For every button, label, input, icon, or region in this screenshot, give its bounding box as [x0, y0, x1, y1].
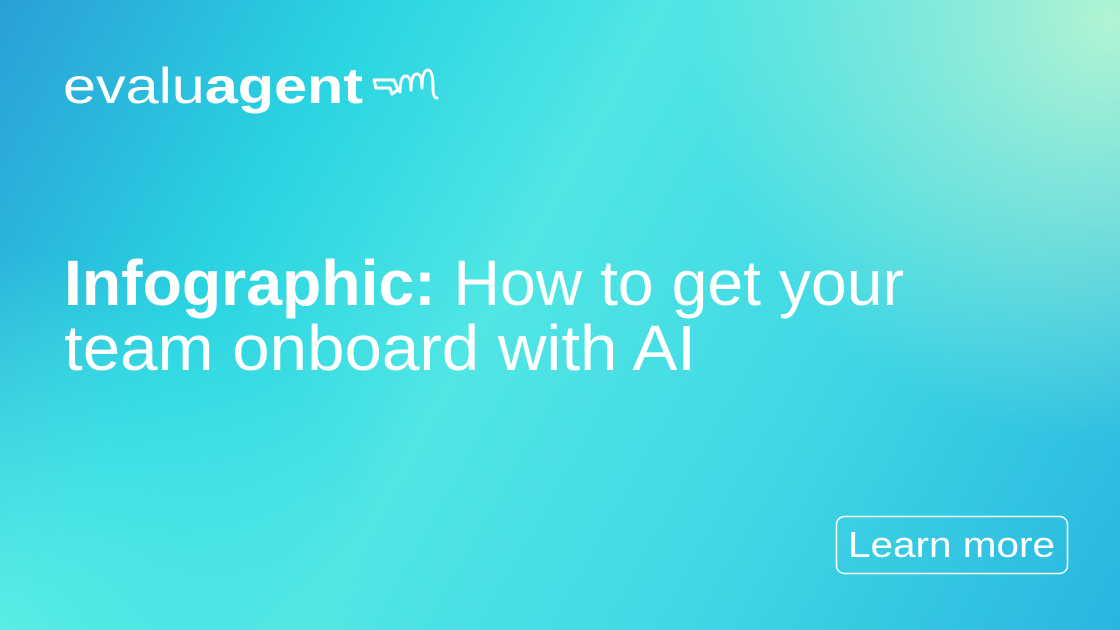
button: learn more: Learn more	[848, 524, 1055, 565]
logo: evalu agent	[63, 58, 363, 114]
button: learn more	[836, 516, 1068, 574]
title: Infographic: How to get your	[64, 247, 904, 319]
title: team onboard with AI	[64, 312, 696, 384]
title	[64, 247, 904, 384]
icon: speech waves	[374, 70, 437, 98]
